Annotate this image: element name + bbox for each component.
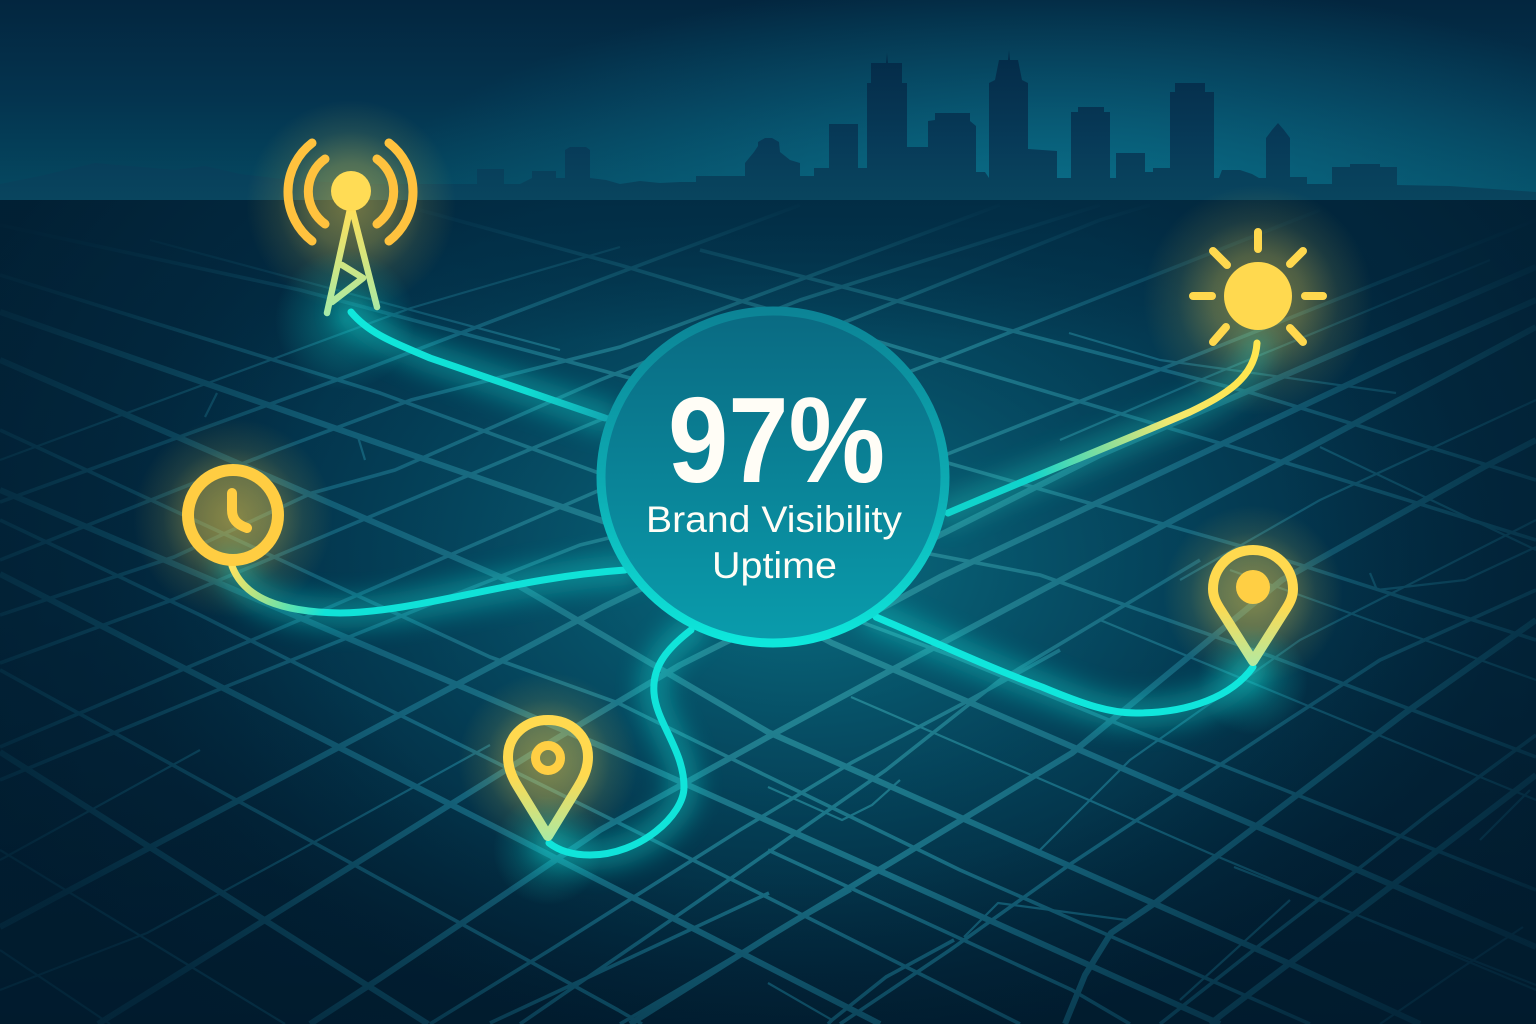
connector: bottom pin to hub: [549, 630, 691, 855]
stat value: 97%: [668, 372, 885, 508]
icon: sun: [1193, 232, 1323, 342]
icon halos: [133, 100, 1373, 905]
icon: location pin left: [508, 720, 588, 836]
stat label line 2: Uptime: [712, 545, 837, 586]
icon: location pin right: [1213, 550, 1293, 661]
city skyline silhouette: [0, 50, 1536, 204]
connector: tower to hub: [351, 312, 605, 418]
central hub stat: [601, 311, 945, 643]
connector: sun to hub: [948, 343, 1257, 513]
connector: right pin to hub: [876, 617, 1253, 713]
hub disc: [601, 311, 945, 643]
connector: clock to hub: [232, 566, 625, 613]
icon: clock: [188, 470, 278, 560]
stat label line 1: Brand Visibility: [646, 499, 903, 540]
icon: radio tower: [288, 143, 413, 313]
sky background: [0, 0, 1536, 200]
